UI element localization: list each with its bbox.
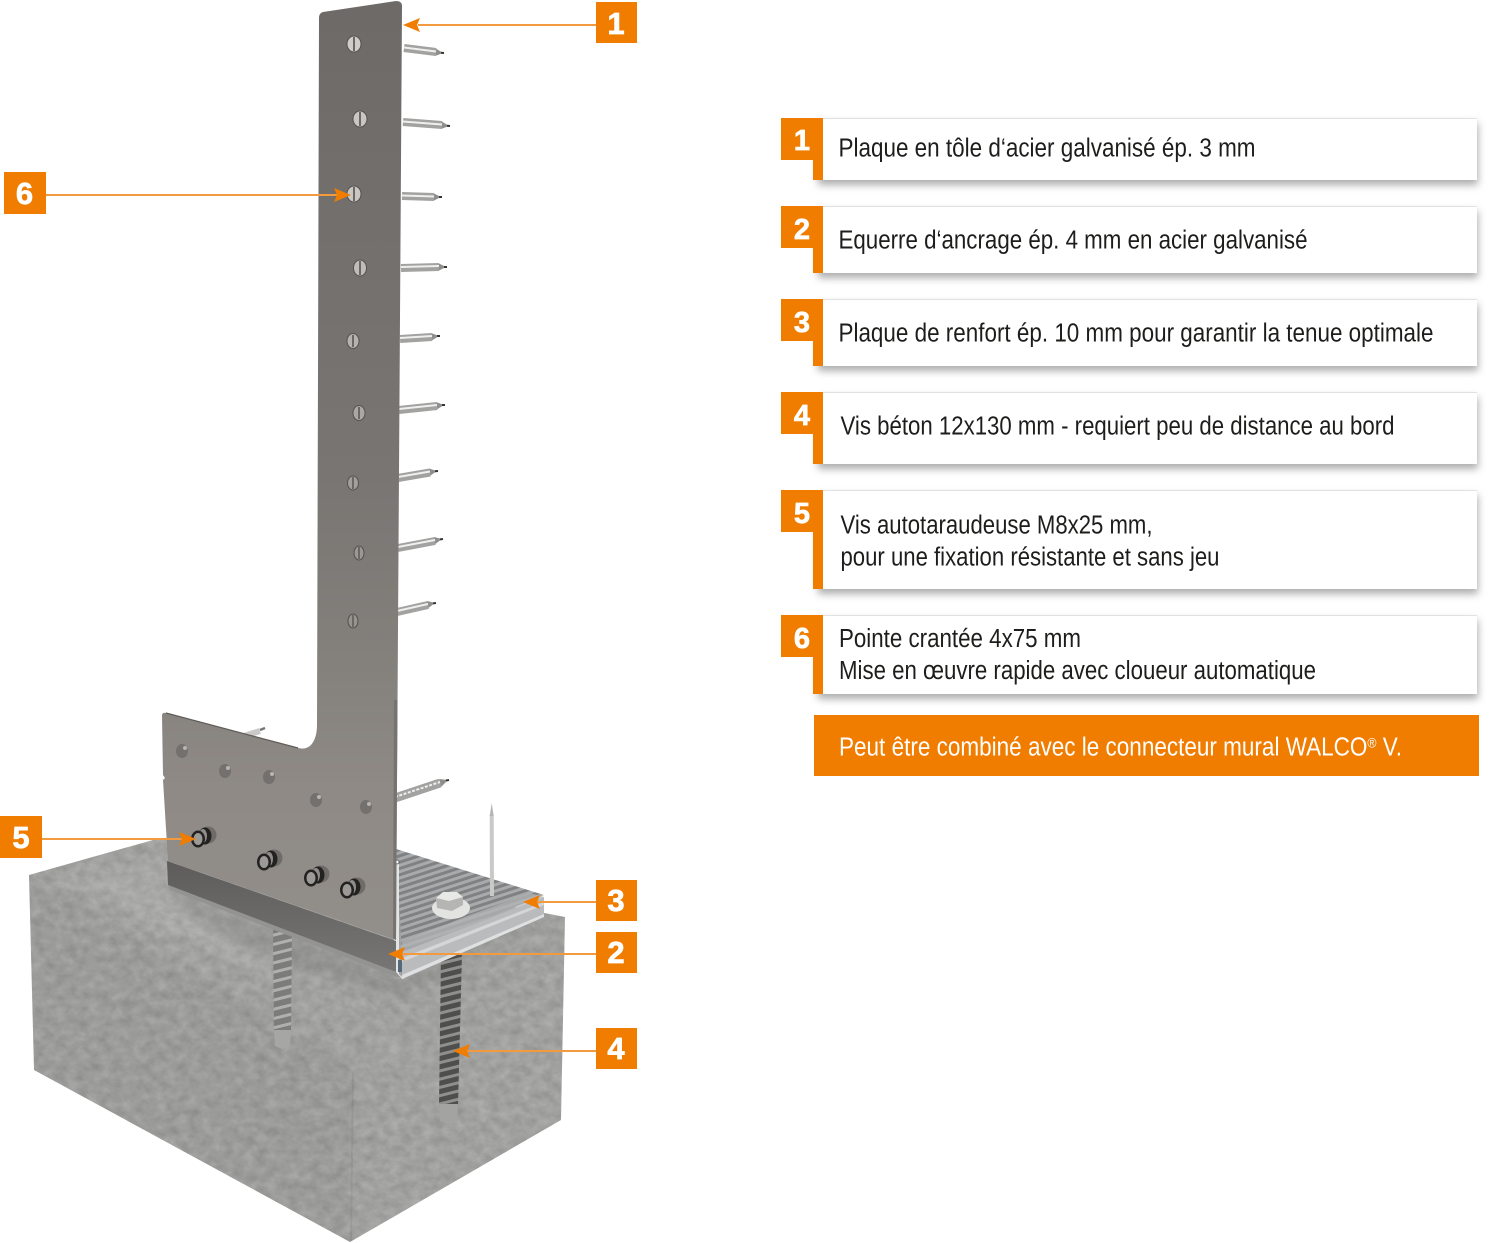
self-tapping screws 5 <box>191 826 366 898</box>
vertical nail on plate <box>490 803 494 896</box>
callout 5: 5 <box>12 820 30 855</box>
legend card 6 <box>781 615 1478 699</box>
hole 2 <box>353 111 367 127</box>
concrete screw left <box>273 930 292 1049</box>
rivet 4 <box>310 793 322 807</box>
dark lower band of bracket <box>167 861 396 972</box>
callout 3: 3 <box>607 883 625 918</box>
nail 10 <box>395 779 449 798</box>
light bottom strip of bracket <box>168 885 402 979</box>
galvanised plate 1 <box>162 1 402 940</box>
screw d <box>340 878 366 898</box>
illustration: concrete block with anchor bracket <box>20 1 570 1243</box>
hole 5 <box>347 334 359 348</box>
legend card 6: Pointe crantée 4x75 mm <box>839 625 1081 653</box>
callout 5 <box>0 816 196 858</box>
hole 7 <box>348 476 358 490</box>
nail 1 <box>404 48 444 56</box>
legend card 4: Vis béton 12x130 mm - requiert peu de distance au bord <box>840 412 1394 440</box>
reinforcement plate 3 <box>396 849 544 979</box>
legend card 5: Vis autotaraudeuse M8x25 mm, <box>840 512 1152 540</box>
plate right edge strip <box>393 700 398 940</box>
legend card 2 <box>781 206 1478 278</box>
legend card 5 <box>781 490 1478 594</box>
hole 6 <box>353 406 365 420</box>
legend card 1: 1 <box>794 125 810 157</box>
screw b <box>257 850 282 870</box>
legend card 2: 2 <box>794 214 810 246</box>
nail 5 <box>400 333 440 341</box>
screw c <box>304 866 330 886</box>
nail 9 <box>397 601 436 612</box>
concrete screw right <box>439 953 462 1124</box>
hole 8 <box>354 546 364 560</box>
nail 7 <box>398 468 438 478</box>
foot top edge shading <box>166 713 298 748</box>
rivet 3 <box>263 770 275 784</box>
callout 2 <box>388 932 637 973</box>
nail 2 <box>403 121 450 129</box>
callout 3 <box>523 880 637 921</box>
legend card 1: Plaque en tôle d‘acier galvanisé ép. 3 mm <box>838 134 1256 162</box>
legend card 1 <box>781 118 1478 185</box>
callout 1: 1 <box>607 6 625 41</box>
legend card 6: 6 <box>794 623 810 655</box>
legend card 6: Mise en œuvre rapide avec cloueur automatique <box>839 657 1316 685</box>
callout 6 <box>4 172 351 214</box>
legend card 2: Equerre d‘ancrage ép. 4 mm en acier galvanisé <box>838 226 1308 254</box>
callout 6: 6 <box>16 176 33 211</box>
callout 4 <box>453 1028 637 1069</box>
hole 9 <box>348 614 358 628</box>
orange note banner: V. <box>1377 734 1402 762</box>
hole 4 <box>354 260 366 276</box>
callout 4: 4 <box>607 1031 625 1066</box>
orange note banner: ® <box>1367 734 1377 750</box>
nail 11 <box>244 728 265 736</box>
legend card 4: 4 <box>794 400 810 432</box>
legend card 5: 5 <box>794 498 810 530</box>
hole 3 <box>347 186 361 202</box>
shadow under bracket <box>173 892 480 994</box>
nail 6 <box>399 402 445 410</box>
angle bracket flange 2 <box>388 852 404 979</box>
legend card 4 <box>781 392 1478 469</box>
legend card 3: Plaque de renfort ép. 10 mm pour garantir la tenue optimale <box>838 320 1434 348</box>
column nail holes <box>347 36 367 628</box>
rivet 5 <box>360 800 372 814</box>
rivet 1 <box>176 744 188 758</box>
nail 8 <box>398 537 443 548</box>
legend card 3 <box>781 299 1478 371</box>
foot rivets <box>176 744 372 814</box>
callout 2: 2 <box>607 935 625 970</box>
nail 3 <box>402 193 442 201</box>
legend card 3: 3 <box>794 307 810 339</box>
legend card 5: pour une fixation résistante et sans jeu <box>840 544 1220 572</box>
orange note banner <box>814 715 1479 776</box>
nails behind plate <box>244 48 450 798</box>
orange note banner: Peut être combiné avec le connecteur mural WALCO <box>839 734 1438 762</box>
callout 1 <box>403 2 637 43</box>
rivet 2 <box>219 764 231 778</box>
screw a <box>191 826 216 848</box>
nail 4 <box>401 263 447 271</box>
hole 1 <box>347 36 361 52</box>
hex bolt head <box>432 892 470 919</box>
concrete block <box>20 830 570 1243</box>
